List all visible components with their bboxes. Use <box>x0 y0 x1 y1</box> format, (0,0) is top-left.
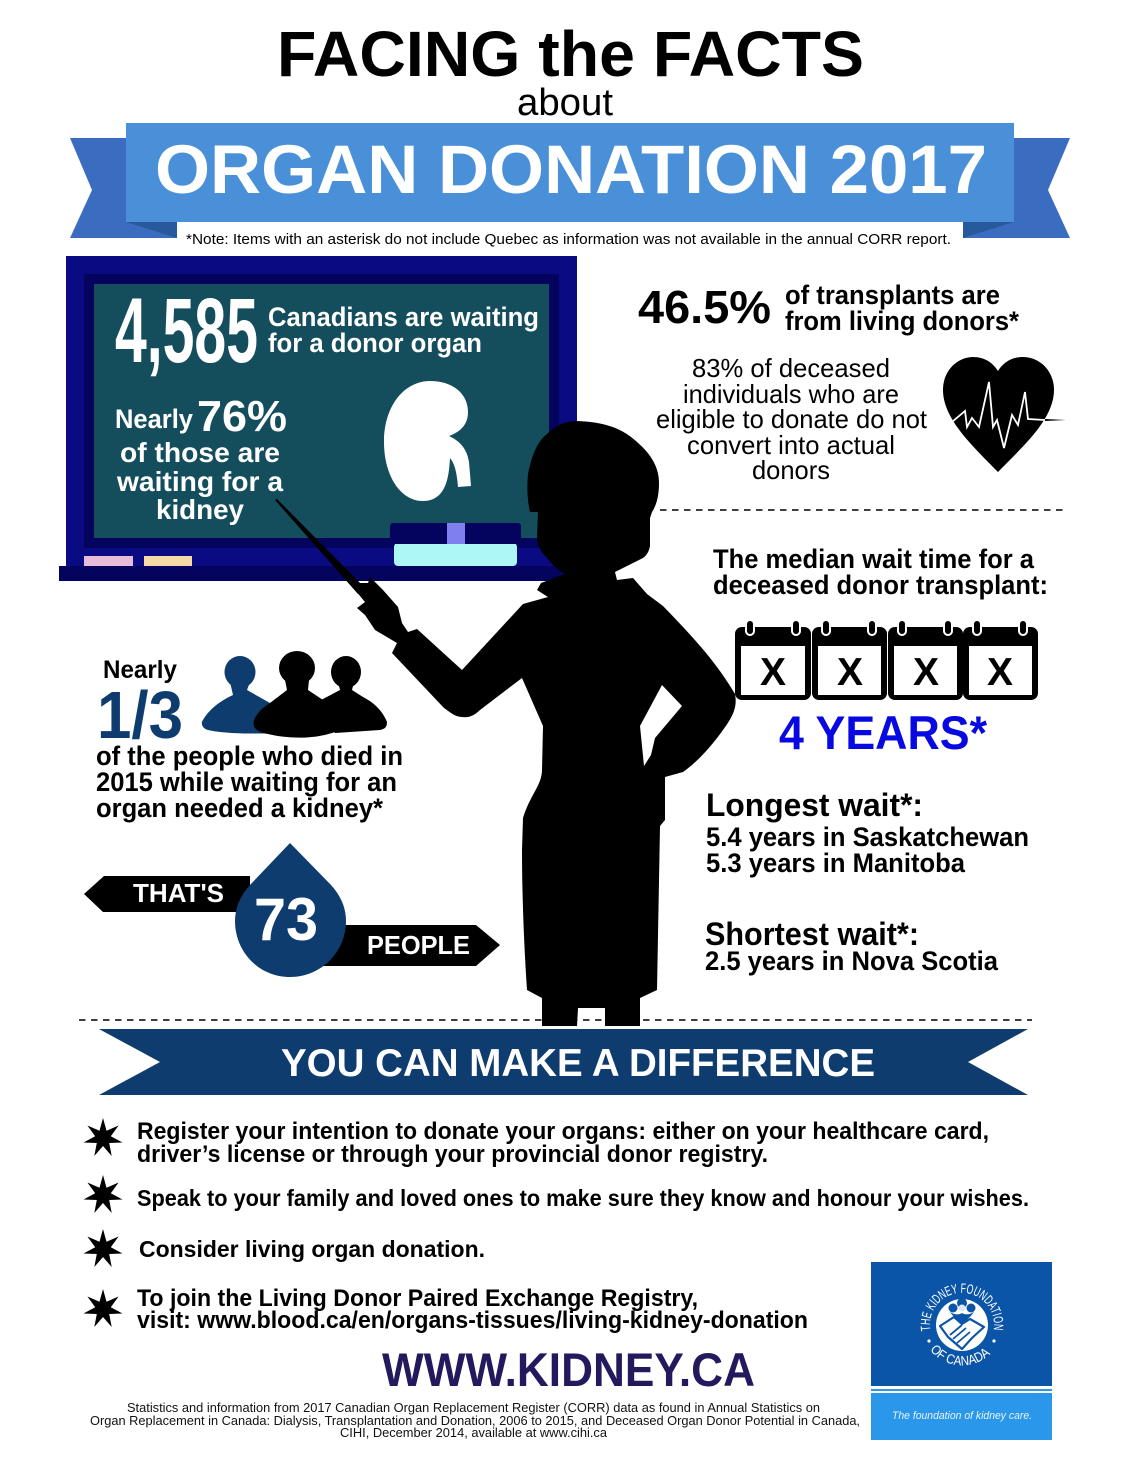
icon: heart with pulse <box>943 357 1066 472</box>
text: longest wait <box>706 787 1029 878</box>
icon: drop with 73 <box>235 843 346 977</box>
ribbon: that's: THAT'S <box>133 878 224 908</box>
calendar 1: X <box>760 651 786 694</box>
text: longest wait: Longest wait*: <box>706 787 923 823</box>
stat: 4 years: 4 YEARS* <box>779 706 988 759</box>
list item 1: driver’s license or through your provincial donor registry. <box>137 1141 768 1168</box>
icon: books <box>390 523 521 566</box>
stat: 76% kidney: Nearly <box>115 404 193 434</box>
icon: calendars <box>735 619 1038 700</box>
logo emblem <box>940 1298 984 1349</box>
stat: 46.5% living donors: from living donors* <box>785 306 1019 336</box>
icon: star <box>84 1289 122 1327</box>
ribbon: that's <box>84 876 250 912</box>
stat: 46.5% living donors <box>638 280 1019 336</box>
calendar 4 <box>963 619 1038 700</box>
logo tagline: The foundation of kidney care. <box>892 1410 1032 1422</box>
stat: 76% kidney: of those are <box>120 437 280 468</box>
banner: you can make a difference: YOU CAN MAKE A DIFFERENCE <box>281 1042 875 1085</box>
calendar 2: X <box>837 651 863 694</box>
calendar 3: X <box>913 651 939 694</box>
stat: 46.5% living donors: 46.5% <box>638 281 771 333</box>
logo circular text: OF CANADA <box>932 1346 990 1366</box>
heading: median wait time <box>713 544 1048 600</box>
stat: nearly 1/3 <box>96 656 403 823</box>
footer sources: Statistics and information from 2017 Canadian Organ Replacement Register (CORR) data as found in Annual Statistics on <box>127 1400 820 1415</box>
stat: nearly 1/3: of the people who died in <box>96 741 403 771</box>
list item 2 <box>84 1175 1029 1213</box>
footer sources <box>90 1400 860 1440</box>
calendar 3 <box>888 619 963 700</box>
stat: 76% kidney: 76% <box>197 392 287 441</box>
icon: three people <box>202 651 387 738</box>
text: 83% of deceased <box>656 353 928 485</box>
text: shortest wait: Shortest wait*: <box>705 916 919 952</box>
list item 4: To join the Living Donor Paired Exchange Registry, <box>137 1285 698 1312</box>
icon: star <box>84 1175 122 1213</box>
icon: star <box>84 1118 122 1156</box>
calendar 1 <box>735 619 811 700</box>
stat: 76% kidney: waiting for a <box>116 466 283 497</box>
logo circular text: THE KIDNEY FOUNDATION <box>920 1284 1004 1332</box>
panel: chalkboard <box>59 256 577 581</box>
list item 3 <box>84 1229 485 1267</box>
calendar 2 <box>812 619 887 700</box>
stat: nearly 1/3: organ needed a kidney* <box>96 793 383 823</box>
stat: nearly 1/3: Nearly <box>103 656 177 684</box>
divider right <box>660 509 1063 511</box>
stat: 76% kidney <box>115 392 287 525</box>
banner: organ donation 2017 <box>70 123 1070 248</box>
logo: kidney foundation of canada <box>871 1262 1052 1440</box>
divider bottom <box>79 1019 1032 1021</box>
heading: median wait time: The median wait time for a <box>713 544 1035 574</box>
footer sources: Organ Replacement in Canada: Dialysis, Transplantation and Donation, 2006 to 2015, and Deceased Organ Donor Potential in Canada, <box>90 1413 860 1428</box>
illustration: presenter silhouette with pointer <box>275 421 736 1026</box>
ribbon: people: PEOPLE <box>367 930 470 960</box>
logo circular text <box>920 1284 1004 1366</box>
stat: 4,585 waiting <box>115 280 539 382</box>
text: 83% of deceased: 83% of deceased <box>692 353 890 383</box>
website: WWW.KIDNEY.CA <box>382 1343 755 1396</box>
stat: 4,585 waiting: Canadians are waiting <box>268 302 539 332</box>
text: longest wait: 5.4 years in Saskatchewan <box>706 822 1029 852</box>
title: about <box>517 82 613 124</box>
stat: 76% kidney: kidney <box>156 494 244 525</box>
icon: star <box>84 1229 122 1267</box>
list item 4: visit: www.blood.ca/en/organs-tissues/living-kidney-donation <box>137 1307 808 1334</box>
text: 83% of deceased: individuals who are <box>683 379 899 409</box>
stat: 4,585 waiting: 4,585 <box>115 280 258 382</box>
stat: 46.5% living donors: of transplants are <box>785 280 1000 310</box>
icon: kidney <box>384 381 471 501</box>
list item 2: Speak to your family and loved ones to make sure they know and honour your wishes. <box>137 1185 1029 1211</box>
banner: organ donation 2017: ORGAN DONATION 2017 <box>155 131 987 208</box>
title: FACING the FACTS <box>277 18 864 90</box>
text: 83% of deceased: donors <box>752 455 830 485</box>
stat: nearly 1/3: 1/3 <box>97 678 183 753</box>
text: shortest wait <box>705 916 999 976</box>
calendar 4: X <box>987 651 1013 694</box>
text: 83% of deceased: convert into actual <box>687 430 895 460</box>
stat: nearly 1/3: 2015 while waiting for an <box>96 767 397 797</box>
footer sources: CIHI, December 2014, available at www.cihi.ca <box>340 1425 608 1440</box>
note: *Note: Items with an asterisk do not include Quebec as information was not available in the annual CORR report. <box>186 232 951 248</box>
list item 4 <box>84 1285 808 1334</box>
icon: drop with 73: 73 <box>254 886 318 953</box>
list item 1: Register your intention to donate your organs: either on your healthcare card, <box>137 1118 989 1145</box>
list item 1 <box>84 1118 989 1168</box>
text: 83% of deceased: eligible to donate do not <box>656 404 928 434</box>
text: longest wait: 5.3 years in Manitoba <box>706 848 966 878</box>
text: shortest wait: 2.5 years in Nova Scotia <box>705 946 999 976</box>
ribbon: people <box>320 925 500 966</box>
heading: median wait time: deceased donor transplant: <box>713 570 1048 600</box>
stat: 4,585 waiting: for a donor organ <box>268 328 482 358</box>
list item 3: Consider living organ donation. <box>139 1236 485 1262</box>
banner: you can make a difference <box>99 1029 1028 1095</box>
title <box>277 18 864 124</box>
